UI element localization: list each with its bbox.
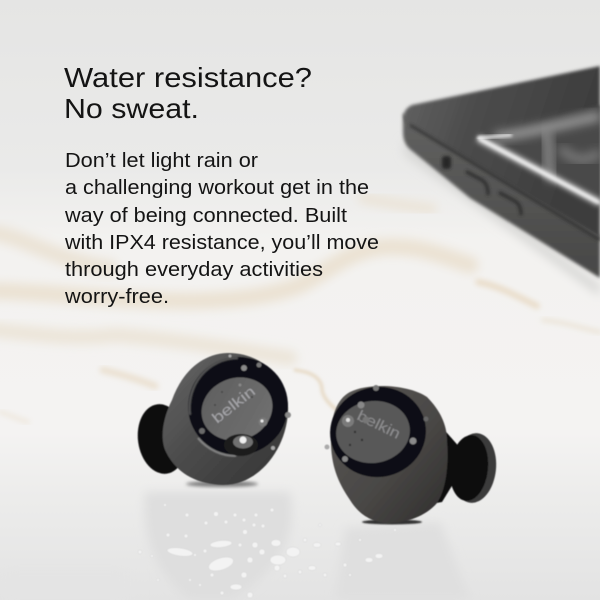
touch disc	[332, 396, 414, 468]
left earbud	[133, 346, 299, 487]
water drops	[324, 385, 428, 462]
phone buttons	[442, 156, 521, 214]
phone edge shadow line	[410, 125, 600, 240]
glossy cap	[323, 379, 433, 485]
body text: way of being connected. Built	[64, 205, 347, 227]
glossy cap	[177, 346, 299, 466]
body text	[64, 150, 379, 308]
touch disc	[193, 368, 281, 450]
earbud body	[163, 353, 288, 485]
reflection of left earbud	[144, 492, 292, 600]
phone top surface	[404, 66, 600, 238]
logo: belkin	[354, 407, 403, 443]
body text: with IPX4 resistance, you’ll move	[64, 232, 379, 254]
heading	[64, 62, 312, 124]
phone screen reflection	[478, 105, 600, 203]
ear tip	[133, 401, 191, 477]
reflection of right earbud	[335, 522, 470, 600]
body text: through everyday activities	[65, 259, 323, 281]
water droplets on surface	[138, 504, 396, 598]
body text: a challenging workout get in the	[65, 177, 369, 199]
phone side edge	[403, 113, 600, 278]
water drops	[199, 354, 291, 456]
earbud stem	[425, 425, 469, 505]
earbud body	[331, 386, 448, 523]
body text: Don’t let light rain or	[65, 150, 258, 172]
ear tip	[448, 431, 500, 505]
body text: worry-free.	[64, 286, 169, 308]
heading: Water resistance?	[64, 62, 312, 93]
heading: No sweat.	[64, 93, 199, 124]
logo: belkin	[209, 383, 259, 427]
phone shadow	[403, 140, 600, 296]
phone	[403, 66, 600, 296]
right earbud	[323, 379, 500, 524]
